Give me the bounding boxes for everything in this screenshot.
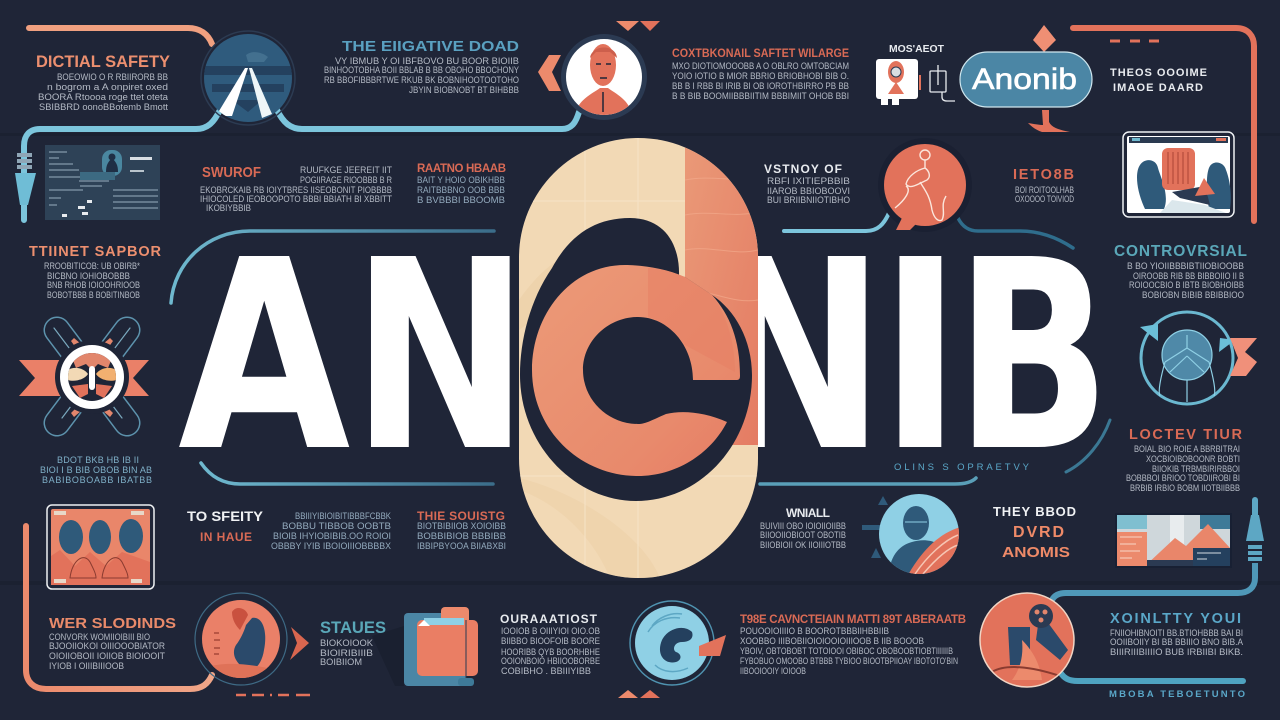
text block: ietosb: BOI ROITOOLHAB — [1015, 185, 1074, 195]
text block: conventional safety image: YOIO IOTIO B MIOR BBRIO BRIOBHOBI BIB O. — [672, 71, 849, 81]
text block: to safety: OBBBY IYIB IBOIOIIIOBBBBX — [271, 541, 391, 551]
heading: rating head: RAATNO HBAAB — [417, 163, 506, 175]
text block: web solutions: OIOIIOBOII IOIIOB BIOIOOIT — [49, 651, 165, 661]
decorative triangles top — [616, 21, 660, 31]
panel: skurof — [200, 164, 392, 213]
panel: they blood — [993, 504, 1076, 561]
icon: orange outline figure circle — [878, 138, 972, 232]
decorative triangles bottom — [618, 690, 660, 698]
text block: to safety: BBIIIYIBIOIBITIBBBFCBBK — [295, 511, 391, 521]
text block: ietosb: OXOOOO TOIVIOD — [1015, 194, 1074, 204]
text block: qualitative: HOORIBB QYB BOORHBHE — [501, 647, 600, 657]
text block: below badge — [40, 455, 152, 485]
icon: diamond — [1033, 25, 1056, 52]
title: ANONIB wordmark letters — [178, 205, 1111, 510]
heading: conventional safety image: COXTBKONAIL SAFTET WILARGE — [672, 46, 849, 60]
decorative dashes top right — [1110, 40, 1159, 42]
text block: the sources: BIOTBIBIIOB XOIOIBB — [417, 521, 506, 531]
connector: top-left blue line with plug — [15, 110, 579, 220]
callout: Anonib pill — [960, 25, 1092, 132]
text block: rating head: B BVBBBI BBOOMB — [417, 195, 505, 205]
panel: the sources — [417, 509, 506, 551]
connector: bottom-left red frame — [26, 526, 212, 689]
text block: locative tour — [1126, 444, 1240, 493]
text block: to safety: BOBBU TIBBOB OOBTB — [282, 521, 391, 531]
title: ANONIB wordmark letters: N — [708, 205, 885, 510]
text block: the conviction matters: FYBOBUO OMOOBO BTBBB TYBIOO BIOOTBPIIOAY IBOTOTO'BIN — [740, 656, 958, 666]
heading: digital safety: DICTIAL SAFETY — [36, 52, 171, 71]
text block: digital safety: BOORA Rtoooa roge ttet oteta — [38, 92, 168, 102]
arrow: red chevron — [290, 627, 309, 660]
text block: the sources: BOBBIBIOB BBBIBB — [417, 531, 506, 541]
text block: xointy you: OOIIBOIIY BI BB BBIIIO BNO BIB.A — [1110, 637, 1243, 647]
text block: qualitative — [501, 626, 600, 676]
text block: wnial: BUIVIII OBO IOIOIIOIIBB — [760, 521, 846, 531]
central O emblem — [519, 130, 765, 578]
icon: side profile circle — [195, 593, 287, 685]
text block: history of: IIAROB BBIOBOOVI — [767, 186, 850, 196]
icon: hand circle — [980, 593, 1074, 687]
text block: locative tour: BOBBBOI BRIOO TOBDIIROBI BI — [1126, 473, 1240, 483]
heading: skurof: SWUROF — [202, 164, 261, 181]
text block: controversial: ROIOOCBIO B IBTB BIOBHOIBB — [1129, 280, 1244, 290]
title: ANONIB wordmark letters: A — [178, 205, 350, 509]
heading: locative tour: LOCTEV TIUR — [1129, 427, 1243, 443]
text block: conventional safety image: B B BIB BOOMIIBBBIITIM BBBIMIIT OHOB BBI — [672, 91, 849, 101]
text block: rating head: RAITBBBNO OOB BBB — [417, 185, 505, 195]
text block: conventional safety image: MXO DIOTIOMOOOBB A O OBLRO OMTOBCIAM — [672, 61, 849, 71]
text block: digital safety: BOEOWIO O R RBIIRORB BB — [57, 72, 168, 82]
text block: skurof: RUUFKGE JEEREIT IIT — [300, 165, 392, 175]
text block: trust supporter — [44, 261, 140, 300]
text block: trust supporter: RROOBITICOB: UB OBIRB* — [44, 261, 140, 271]
text block: qualitative: IOOIOB B OIIIYIOI OIO.OB — [501, 626, 600, 636]
heading: the conviction matters: T98E CAVNCTEIAIN MATTI 89T ABERAATB — [740, 614, 966, 626]
image card: three faces — [47, 505, 154, 589]
text block: skurof: POGIIRAGE RIOOBBB B R — [300, 175, 392, 185]
text block: to safety: BIOIB IHYIOBIBIB.OO ROIOI — [273, 531, 391, 541]
text block: the eligative road: JBYIN BIOBNOBT BT BIHBBB — [409, 85, 519, 95]
text block: trust supporter: BICBNO IOHIOBOBBB — [47, 271, 130, 281]
heading: statues: STAUES — [320, 619, 386, 637]
text block: trust supporter: BNB RHOB IOIOOHRIOOB — [47, 280, 140, 290]
icon: head globe — [1140, 312, 1257, 404]
text block: the eligative road: RB BBOFIBBBRTWE RKUB BK BOBNIHOOTOOTOHO — [324, 75, 519, 85]
icon: device — [876, 59, 955, 105]
heading: online image board: THEOS OOOIME — [1110, 67, 1207, 79]
panel: trust supporter — [29, 244, 162, 300]
text block: controversial: B BO YIOIIBBBIBTIIOBIOOBB — [1127, 261, 1244, 271]
panel: locative tour — [1126, 427, 1243, 493]
subheading: anomis: ANOMIS — [1002, 544, 1070, 561]
connector: top-right red frame — [1073, 28, 1254, 221]
arrow: orange chevron — [538, 55, 561, 91]
text block: digital safety: n bogrom a A onpiret oxed — [47, 82, 168, 92]
text block: conventional safety image: BB B I RBB BI IRIB BI OB IOROTHBIRRO PB BB — [672, 81, 849, 91]
heading: ietosb: IETO8B — [1013, 167, 1074, 183]
icon: road circle — [201, 31, 295, 125]
text block: skurof — [200, 165, 392, 213]
heading: web solutions: WER SLODINDS — [49, 615, 176, 632]
ribbon — [19, 360, 149, 396]
heading: history of: VSTNOY OF — [764, 162, 842, 176]
text block: the conviction matters — [740, 626, 958, 676]
text block: the eligative road: VY IBMUB Y OI IBFBOVO BU BOOR BIOIIB — [335, 56, 519, 66]
image card: landscape — [1115, 513, 1232, 568]
footer label: MBOBA TEBOETUNTO — [1109, 689, 1245, 700]
heading: to safety: TO SFEITY — [187, 509, 263, 524]
text block: wnial: BIIOBIOII OK IIOIIIOTBB — [760, 540, 846, 550]
text block: skurof: EKOBRCKAIB RB IOIYTBRES IISEOBONIT PIOBBBB — [200, 185, 392, 195]
text block: locative tour: XOCBIOIBOBOONR BOBTI — [1146, 454, 1240, 464]
panel: statues — [320, 619, 386, 667]
callout: Anonib pill: Anonib — [972, 63, 1077, 96]
text block: below badge: BDOT BKB HB IB II — [57, 455, 139, 465]
text block: conventional safety image — [672, 61, 849, 101]
heading: trust supporter: TTIINET SAPBOR — [29, 244, 162, 260]
panel: the conviction matters — [740, 614, 966, 676]
panel: controversial — [1114, 243, 1247, 300]
heading: qualitative: OURAAATIOST — [500, 612, 598, 626]
heading: wnial: WNIALL — [786, 506, 830, 520]
subheading: in have: IN HAUE — [200, 530, 252, 544]
panel: web solutions — [49, 615, 176, 671]
panel: xointy you — [1110, 611, 1243, 657]
text block: controversial: OIROOBB RIB BB BIBBOIIO II B — [1133, 271, 1244, 281]
decorative arcs around wordmark — [171, 213, 1110, 484]
heading: controversial: CONTROVRSIAL — [1114, 243, 1247, 260]
text block: statues: BOIBIIOM — [320, 657, 362, 667]
heading: xointy you: XOINLTTY YOUI — [1110, 611, 1241, 627]
subheading: dvrd: DVRD — [1013, 524, 1064, 541]
title: ANONIB wordmark letters: B — [955, 205, 1111, 509]
label: mosiaeot: MOS'AEOT — [889, 43, 945, 55]
icon: crossed badge — [19, 328, 149, 423]
text block: below badge: BABIBOBOABB IBATBB — [42, 475, 152, 485]
image card: tablet figures — [1123, 132, 1234, 217]
text block: the sources: IBBIPBYOOA BIIABXBI — [417, 541, 506, 551]
text block: controversial — [1127, 261, 1244, 300]
text block: wnial: BIIOOIIOBIOOT OBOTIB — [760, 530, 846, 540]
text block: qualitative: BIIBBO BIOOFOIB BOORE — [501, 636, 600, 646]
icon: anchor shape — [1028, 110, 1070, 132]
text block: web solutions — [49, 632, 165, 671]
label: online opportunity: OLINS S OPRAETVY — [894, 462, 1030, 473]
text block: qualitative: OOIONBOIO HBIIOOBORBE — [501, 656, 600, 666]
heading: the sources: THIE SOUISTG — [417, 509, 505, 523]
text block: web solutions: IYIOB I OIIIBIIIOOB — [49, 661, 124, 671]
text block: the sources — [417, 521, 506, 551]
icon: suitcase — [372, 607, 478, 686]
heading: they blood: THEY BBOD — [993, 504, 1076, 519]
connector: bottom-right blue line with plug — [1052, 500, 1264, 681]
heading: online image board — [1110, 67, 1207, 94]
text block: skurof: IKOBIYBBIB — [206, 203, 251, 213]
text block: xointy you: FNIIOHIBNOITI BB.BTIOHBBB BAI BI — [1110, 628, 1243, 638]
text block: history of — [767, 176, 850, 205]
heading: online image board: IMAOE DAARD — [1113, 82, 1203, 94]
title: ANONIB wordmark letters: N — [352, 205, 529, 510]
text block: locative tour: BOIAL BIO ROIE A BBRBITRAI — [1134, 444, 1240, 454]
panel: qualitative — [500, 612, 600, 676]
text block: xointy you — [1110, 628, 1243, 657]
title: ANONIB wordmark letters: I — [879, 205, 962, 509]
heading: the eligative road: THE EIIGATIVE DOAD — [342, 38, 519, 55]
text block: rating head: BAIT Y HOIO OBIKHBB — [417, 175, 505, 185]
text block: statues: BIOIRIBIIIB — [320, 648, 373, 658]
text block: trust supporter: BOBOTBBB B BOBITINBOB — [47, 290, 140, 300]
text block: ietosb — [1015, 185, 1074, 204]
text block: below badge: BIOI I B BIB OBOB BIN AB — [40, 465, 152, 475]
text block: locative tour: BRBIB IRBIO BOBM IIOTBIIBBB — [1130, 483, 1240, 493]
text block: rating head — [417, 175, 505, 205]
text block: history of: BUI BRIIBNIIOTIBHO — [767, 195, 850, 205]
text block: xointy you: BIIIRIIIBIIIIO BUB IRBIIBI BIKB. — [1110, 647, 1243, 657]
icon: portrait blue circle — [862, 494, 959, 574]
text block: web solutions: CONVORK WOMIIOIBIII BIO — [49, 632, 150, 642]
text block: qualitative: COBIBHO . BBIIIYIBB — [501, 666, 591, 676]
icon: blue swirl circle — [630, 601, 726, 685]
text block: wnial — [760, 521, 846, 550]
text block: the conviction matters: POUOOIOIIIIO B BOOROTBBBIIHBBIIB — [740, 626, 889, 636]
panel: ietosb — [1013, 167, 1074, 204]
text block: history of: RBFI IXITIEPBBIB — [767, 176, 850, 186]
icon: portrait circle — [538, 34, 647, 120]
text block: the conviction matters: YBOIV, OBTOBOBT TOTOIOOI OBIBOC OBOBOOBTIOBTIIIIIIB — [740, 646, 953, 656]
text block: the eligative road: BINHOOTOBHA BOII BBLAB B BB OBOHO BBOCHONY — [324, 65, 519, 75]
text block: statues — [320, 638, 373, 667]
text block: the conviction matters: XOOBBO IIIBOBIIOIOIOOIOIIIOOB B IIB BOOOB — [740, 636, 924, 646]
text block: controversial: BOBIOBN BIBIB BBIBBIOO — [1142, 290, 1244, 300]
panel: conventional safety image — [672, 46, 849, 101]
screen: profile panel — [45, 145, 160, 220]
text block: locative tour: BIIOKIB TRBMBIRIRBBOI — [1152, 464, 1240, 474]
text block: statues: BIOKOIOOK — [320, 638, 373, 648]
text block: the eligative road — [324, 56, 519, 95]
panel: wnial — [760, 506, 846, 550]
text block: to safety — [271, 511, 391, 551]
text block: skurof: IHIOCOLED IEOBOOPOTO BBBI BBIATH BI XBBITT — [200, 194, 392, 204]
text block: digital safety: SBIBBRD oonoBBotemb Bmott — [39, 102, 169, 112]
panel: the eligative road — [324, 38, 519, 95]
text block: web solutions: BJOOIIOKOI OIIIOOOBIATOR — [49, 641, 165, 651]
text block: digital safety — [38, 72, 169, 112]
panel: rating head — [417, 163, 506, 205]
panel: history of — [764, 162, 850, 205]
decorative dashes bottom — [236, 694, 310, 696]
connector: top-left peach line — [29, 28, 212, 44]
panel: to safety — [187, 509, 391, 551]
panel: digital safety — [36, 52, 171, 112]
text block: the conviction matters: IIBOOIOOIY IOIOOB — [740, 666, 806, 676]
